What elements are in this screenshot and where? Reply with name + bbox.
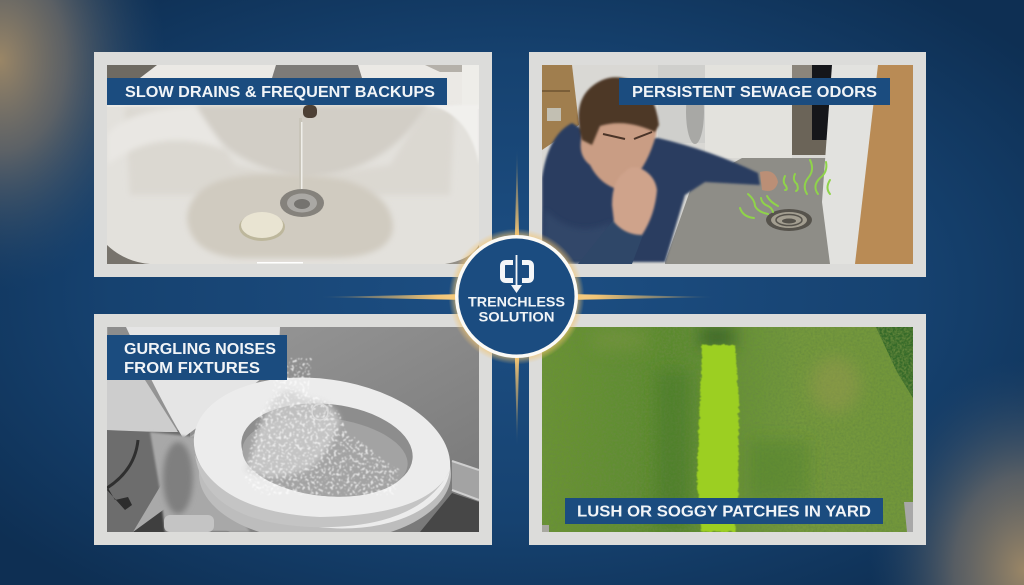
photo: man covering nose near floor drain: [542, 65, 913, 264]
label: gurgling noises: [107, 335, 287, 380]
panel: sewage odors: [529, 52, 926, 277]
man: [542, 77, 778, 264]
photo: lawn with lush strip: [542, 327, 913, 532]
label: slow drains: SLOW DRAINS & FREQUENT BACKUPS: [125, 84, 435, 101]
gold light rays: [318, 148, 716, 446]
toilet seat: [194, 378, 450, 528]
soap bar: [239, 212, 285, 241]
badge text: SOLUTION: [478, 309, 554, 325]
odor squiggles: [740, 160, 830, 218]
hedge: [876, 327, 913, 398]
panel: slow drains: [94, 52, 492, 277]
label: gurgling noises: GURGLING NOISES: [124, 341, 276, 358]
label: soggy patches: LUSH OR SOGGY PATCHES IN YARD: [577, 504, 871, 520]
lush strip: [697, 345, 739, 532]
center badge: trenchless solution: [448, 228, 584, 364]
floor drain: [766, 209, 812, 231]
label: gurgling noises: FROM FIXTURES: [124, 360, 260, 377]
label: sewage odors: PERSISTENT SEWAGE ODORS: [632, 84, 877, 101]
icon: pipe with down arrow: [502, 255, 532, 293]
photo: sink with slow drain: [107, 65, 479, 264]
drain: [280, 189, 324, 217]
water splash: [245, 358, 400, 495]
panel: gurgling noises: [94, 314, 492, 545]
badge text: TRENCHLESS: [468, 294, 565, 310]
label: sewage odors: [619, 78, 890, 105]
panel: soggy patches: [529, 314, 926, 545]
label: soggy patches: [565, 498, 883, 524]
photo: toilet bowl gurgling: [107, 327, 479, 544]
label: slow drains: [107, 78, 447, 105]
badge text: [468, 294, 565, 325]
